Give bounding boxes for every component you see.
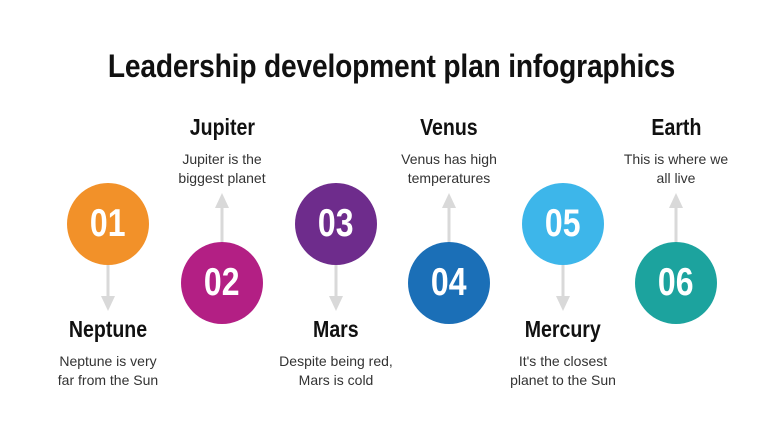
text: Mars: Despite being red, — [279, 353, 393, 369]
heading: Mars: Mars — [313, 316, 359, 342]
text: Venus: Venus has high — [401, 151, 497, 167]
text: Jupiter: Jupiter is the — [182, 151, 262, 167]
text: Mars — [279, 353, 393, 388]
text: Earth — [624, 151, 728, 186]
heading: Mercury: Mercury — [525, 316, 601, 342]
text: Venus — [401, 151, 497, 186]
text: Neptune — [58, 353, 158, 388]
circle 01: 01 — [90, 202, 126, 245]
text: Earth: This is where we — [624, 151, 728, 167]
circle 06 — [635, 242, 717, 324]
text: Mercury: planet to the Sun — [510, 372, 616, 388]
title: Leadership development plan infographics — [108, 48, 675, 84]
text: Jupiter — [178, 151, 266, 186]
circle 04: 04 — [431, 261, 467, 304]
circle 05: 05 — [545, 202, 581, 245]
circle 02: 02 — [204, 261, 240, 304]
circle 02 — [181, 242, 263, 324]
text: Neptune: Neptune is very — [59, 353, 157, 369]
heading: Neptune: Neptune — [69, 316, 147, 342]
circle 06: 06 — [658, 261, 694, 304]
text: Neptune: far from the Sun — [58, 372, 158, 388]
text: Mercury: It's the closest — [519, 353, 607, 369]
circle 05 — [522, 183, 604, 265]
text: Jupiter: biggest planet — [178, 170, 266, 186]
heading: Venus: Venus — [420, 114, 478, 140]
text: Mercury — [510, 353, 616, 388]
text: Mars: Mars is cold — [299, 372, 373, 388]
circle 01 — [67, 183, 149, 265]
heading: Jupiter: Jupiter — [189, 114, 255, 140]
circle 03: 03 — [318, 202, 354, 245]
heading: Earth: Earth — [651, 114, 701, 140]
text: Earth: all live — [657, 170, 695, 186]
circle 04 — [408, 242, 490, 324]
text: Venus: temperatures — [408, 170, 490, 186]
circle 03 — [295, 183, 377, 265]
